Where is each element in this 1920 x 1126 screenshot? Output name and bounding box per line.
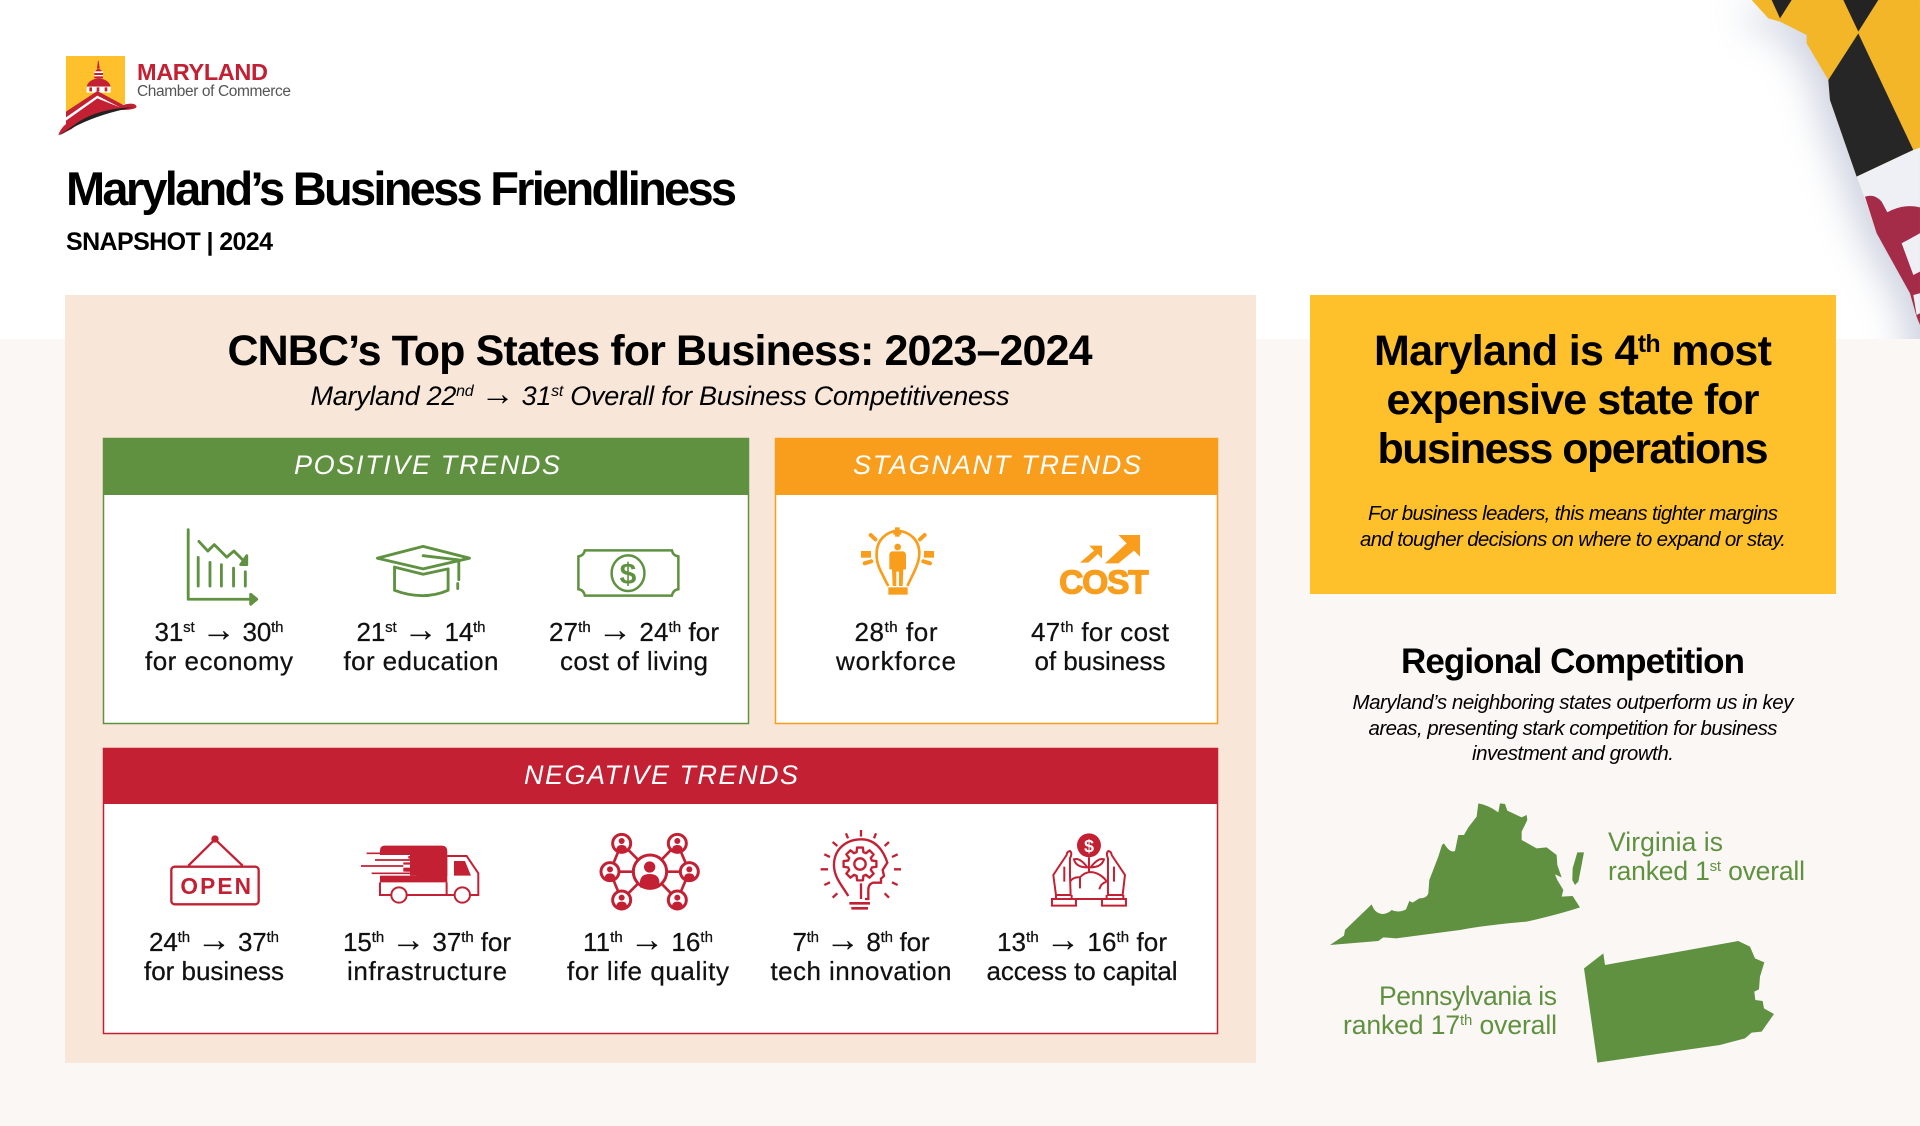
text: access to capital: → 16 — [1046, 921, 1116, 959]
text: economy: th — [271, 619, 284, 636]
text: business: th — [267, 929, 279, 946]
text: business: 24 — [149, 927, 178, 957]
text: Pennsylvania rank — [1343, 981, 1557, 1040]
text: tech innovation: → 8 — [826, 921, 881, 959]
text: economy: 31 — [154, 617, 183, 647]
text: education: → 14 — [404, 611, 473, 649]
callout heading: expensive state for — [1386, 376, 1760, 424]
icon: dollar bill — [578, 550, 678, 596]
text: workforce: for — [898, 617, 938, 647]
text: cost of business: of business — [1034, 646, 1166, 676]
callout body — [1360, 502, 1786, 551]
text: economy: for economy — [145, 646, 293, 676]
map: Pennsylvania — [1584, 941, 1774, 1063]
text: Virginia rank: overall — [1721, 856, 1805, 886]
text: Virginia rank: ranked 1 — [1608, 856, 1710, 886]
text: Pennsylvania rank: Pennsylvania is — [1379, 981, 1557, 1011]
text: education: th — [473, 619, 486, 636]
panel: negative trends — [103, 748, 1218, 1034]
text: Pennsylvania rank: ranked 17 — [1343, 1010, 1460, 1040]
text: infrastructure: th — [461, 929, 474, 946]
panel subheading: → 31 — [481, 375, 551, 413]
text: workforce — [835, 617, 956, 676]
panel: CNBC top states — [65, 295, 1256, 1063]
text: life quality: → 16 — [630, 921, 700, 959]
logo subtitle: Chamber of Commerce — [137, 83, 291, 100]
text: cost of business: 47 — [1031, 617, 1060, 647]
icon: rising cost: COST — [1059, 564, 1149, 601]
text: Virginia rank: st — [1710, 858, 1722, 875]
icon: hands and dollar plant: $ — [1084, 836, 1094, 856]
text: cost of living — [549, 611, 719, 676]
icon: rising cost — [1059, 535, 1149, 601]
text: infrastructure: th — [372, 929, 384, 946]
icon: open sign: OPEN — [180, 873, 251, 899]
stagnant trends header: STAGNANT TRENDS — [853, 450, 1141, 480]
text: life quality: th — [610, 929, 623, 946]
text: infrastructure: infrastructure — [347, 956, 507, 986]
panel heading: CNBC’s Top States for Business: 2023–2024 — [228, 327, 1093, 375]
panel: stagnant trends — [775, 438, 1218, 724]
text: tech innovation — [770, 921, 952, 986]
text: education: 21 — [356, 617, 385, 647]
text: life quality: th — [700, 929, 713, 946]
text: infrastructure: 15 — [343, 927, 372, 957]
text: access to capital: th — [1117, 929, 1129, 946]
callout heading — [1374, 327, 1772, 473]
callout body: For business leaders, this means tighter margins — [1368, 502, 1778, 525]
text: Virginia rank — [1608, 827, 1805, 886]
text: tech innovation: for — [893, 927, 930, 957]
icon: graduation cap — [377, 546, 470, 596]
icon: head with gear — [821, 830, 901, 908]
text: tech innovation: tech innovation — [770, 956, 952, 986]
icon: declining bar chart — [188, 530, 257, 604]
regional competition description: investment and growth. — [1472, 742, 1674, 765]
icon: people network — [601, 834, 698, 909]
text: economy: st — [183, 619, 195, 636]
text: tech innovation: 7 — [792, 927, 807, 957]
map: Virginia — [1330, 803, 1584, 945]
text: infrastructure — [343, 921, 511, 986]
icon: hands and dollar plant — [1052, 833, 1126, 906]
text: education: for education — [344, 646, 498, 676]
text: life quality: 11 — [583, 927, 610, 957]
positive trends header: POSITIVE TRENDS — [294, 450, 560, 480]
text: life quality: for life quality — [567, 956, 729, 986]
text: education — [344, 611, 498, 676]
text: access to capital: for — [1129, 927, 1167, 957]
callout heading: most — [1660, 327, 1772, 375]
text: tech innovation: th — [881, 929, 893, 946]
text: cost of living: → 24 — [598, 611, 668, 649]
text: cost of living: th — [669, 619, 681, 636]
logo: Maryland Chamber of Commerce — [58, 56, 291, 136]
text: workforce: workforce — [835, 646, 956, 676]
text: workforce: th — [885, 619, 898, 636]
callout body: and tougher decisions on where to expand or stay. — [1360, 528, 1786, 551]
callout heading: th — [1638, 330, 1661, 358]
icon: dollar bill: $ — [620, 558, 637, 591]
regional competition description — [1352, 691, 1795, 765]
text: access to capital: th — [1026, 929, 1039, 946]
text: Pennsylvania rank: overall — [1472, 1010, 1557, 1040]
negative trends header: NEGATIVE TRENDS — [524, 760, 798, 790]
text: cost of living: cost of living — [560, 646, 708, 676]
text: economy: → 30 — [202, 611, 271, 649]
text: cost of business: for cost — [1074, 617, 1170, 647]
panel: positive trends — [103, 438, 749, 724]
text: access to capital: 13 — [997, 927, 1026, 957]
text: infrastructure: for — [474, 927, 511, 957]
text: Virginia rank: Virginia is — [1608, 827, 1723, 857]
title: Maryland’s Business Friendliness — [66, 162, 737, 215]
text: business: th — [178, 929, 190, 946]
text: cost of living: 27 — [549, 617, 578, 647]
regional competition description: areas, presenting stark competition for business — [1368, 717, 1778, 740]
icon: open sign — [171, 835, 259, 904]
panel subheading: Overall for Business Competitiveness — [563, 381, 1010, 411]
callout heading: Maryland is 4 — [1374, 327, 1638, 375]
text: cost of living: for — [681, 617, 719, 647]
icon: person in light bulb — [861, 527, 934, 595]
text: workforce: 28 — [854, 617, 884, 647]
text: tech innovation: th — [807, 929, 819, 946]
icon: delivery truck — [361, 846, 478, 903]
callout: 4th most expensive state — [1310, 295, 1836, 594]
text: access to capital — [986, 921, 1178, 986]
panel subheading: Maryland 22 — [310, 381, 456, 411]
text: Pennsylvania rank: th — [1460, 1012, 1472, 1029]
text: cost of business — [1031, 617, 1170, 676]
text: cost of business: th — [1061, 619, 1073, 636]
logo emblem: state house dome — [58, 56, 137, 136]
heading: regional competition: Regional Competition — [1401, 642, 1745, 681]
text: infrastructure: → 37 — [391, 921, 461, 959]
text: education: st — [385, 619, 397, 636]
regional competition description: Maryland’s neighboring states outperform us in key — [1352, 691, 1795, 714]
text: economy — [145, 611, 293, 676]
panel subheading: st — [551, 383, 564, 400]
logo wordmark: MARYLAND — [137, 59, 268, 85]
callout heading: business operations — [1378, 425, 1768, 473]
panel subheading: nd — [456, 383, 475, 400]
flag decoration — [1742, 0, 1920, 339]
text: access to capital: access to capital — [986, 956, 1178, 986]
text: life quality — [567, 921, 729, 986]
text: business: → 37 — [197, 921, 267, 959]
subtitle: SNAPSHOT | 2024 — [66, 228, 273, 256]
text: business: for business — [144, 956, 284, 986]
text: business — [144, 921, 284, 986]
text: cost of living: th — [578, 619, 591, 636]
